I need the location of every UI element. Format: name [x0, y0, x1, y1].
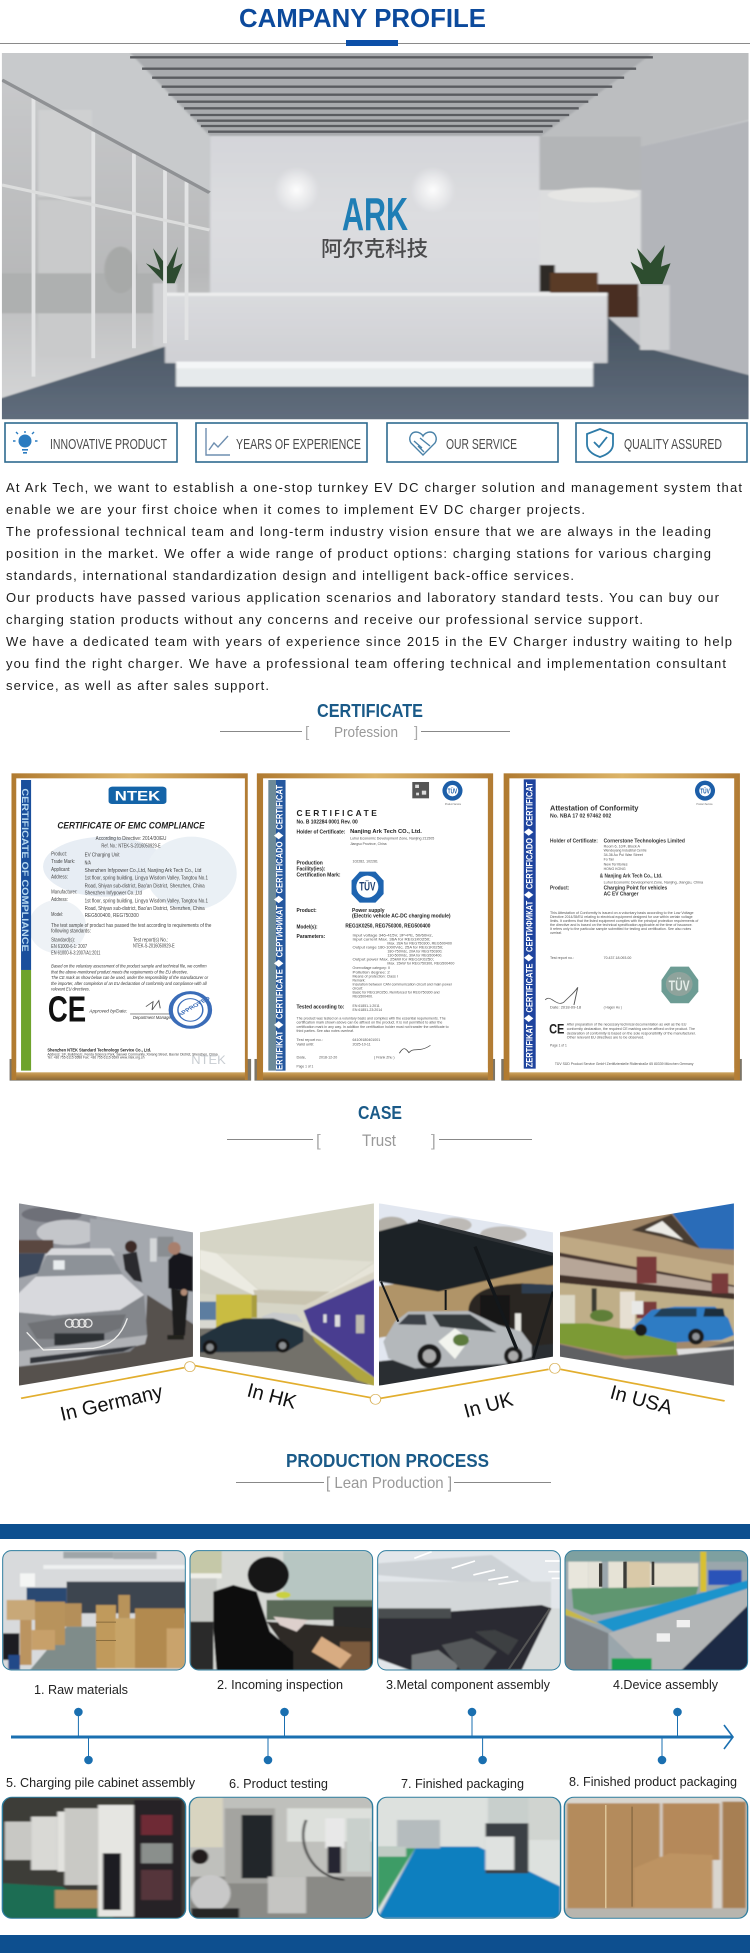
certificate: NTEK EMC compliance: NTEK-S-2016050929-E: [133, 943, 175, 949]
certificate: Attestation of Conformity: ( Hagen Hu ): [604, 1005, 622, 1009]
label: In HK: In HK: [245, 1380, 299, 1414]
badge: our service: OUR SERVICE: [446, 436, 517, 453]
certificate: Attestation of Conformity: HONG KONG: [604, 867, 626, 871]
certificate: TUV certificate Nanjing Ark Tech: Facility(ies):: [297, 866, 325, 872]
certificate: TUV certificate Nanjing Ark Tech: Max. 28A for REG750300, REG500400: [387, 941, 452, 945]
text block: company introduction: service, as well as after sales support.: [6, 678, 269, 693]
certificate: TUV certificate Nanjing Ark Tech: Overvoltage category: II: [353, 966, 390, 970]
certificate: TUV certificate Nanjing Ark Tech: third parties. See also notes overleaf.: [297, 1029, 354, 1033]
certificate: NTEK EMC compliance: Shenzhen Infypower Co.,Ltd, Nanjing Ark Tech Co., Ltd: [85, 868, 202, 874]
bottom blue band: [0, 1935, 750, 1953]
certificate: TUV certificate Nanjing Ark Tech: certification mark in any way. In addition the certification holder must not transfer the certificate to: [297, 1025, 449, 1029]
certificate: TUV certificate Nanjing Ark Tech: Certification Mark:: [297, 872, 341, 878]
photo: finished packaging: [378, 1798, 560, 1918]
certificate: TUV certificate Nanjing Ark Tech: Input voltage 346-415V, 3P+PE, 50/60Hz,: [353, 933, 433, 937]
certificate: TUV certificate Nanjing Ark Tech: Pollution degree: 2: [353, 970, 390, 974]
certificate: TUV certificate Nanjing Ark Tech: (Electric vehicle AC-DC charging module): [352, 914, 451, 919]
photo: raw materials: [3, 1551, 185, 1670]
certificate: Attestation of Conformity: No. NBA 17 02 97462 002: [550, 813, 612, 819]
certificate: NTEK EMC compliance: Standard(s):: [51, 937, 75, 943]
certificate: TUV certificate Nanjing Ark Tech: Model(s):: [297, 924, 318, 930]
photo: product testing: [190, 1798, 372, 1918]
certificate: NTEK EMC compliance: CERTIFICATE OF EMC COMPLIANCE: [57, 821, 205, 831]
certificate: Attestation of Conformity: Test report no.:: [550, 956, 574, 960]
title: Campany Profile: [0, 3, 750, 46]
text block: company introduction: charging station products without any concerns and receive our professional service support.: [6, 612, 643, 627]
certificate: TUV certificate Nanjing Ark Tech: CERTIFICATE: [297, 808, 377, 818]
certificate: NTEK EMC compliance: Based on the voluntary assessment of the product sample and technical file, we confirm: [51, 964, 207, 969]
certificate: TUV certificate Nanjing Ark Tech: Product Service: [445, 803, 461, 806]
certificate: NTEK EMC compliance: CERTIFICATE OF COMPLIANCE: [20, 788, 30, 952]
step captions: 3.Metal component assembly: [386, 1677, 550, 1692]
certificate: NTEK EMC compliance: that the above-mentioned product meets the requirements of the EU directive.: [51, 970, 188, 975]
timeline: gold zigzag line: [21, 1362, 725, 1404]
heading: certificate: [220, 701, 510, 741]
certificate: TUV certificate Nanjing Ark Tech: Means of protection: Class I: [353, 974, 398, 978]
certificate: TUV certificate Nanjing Ark Tech: Page 1 of 1: [297, 1064, 314, 1068]
photo: device assembly: [566, 1551, 748, 1670]
certificate: TUV certificate Nanjing Ark Tech: Valid until:: [297, 1042, 314, 1046]
text block: company introduction: [6, 480, 742, 693]
certificate: Attestation of Conformity: ZERTIFIKAT ◆ CERTIFICATE ◆ СЕРТИФИКАТ ◆ CERTIFICADO ◆ CERTIFICAT: [523, 782, 535, 1067]
label: In UK: In UK: [462, 1388, 516, 1423]
process photos row two: [0, 1793, 750, 1922]
case photos right pair: [379, 1204, 734, 1386]
certificate: TUV certificate Nanjing Ark Tech: Insulation between CAN communication circuit and main power: [353, 982, 452, 986]
certificate: NTEK EMC compliance: N/A: [85, 860, 91, 866]
production process panel: [0, 1545, 750, 1922]
certificate: Attestation of Conformity: Wendeyang Industrial Centre: [604, 848, 647, 852]
certificate: Attestation of Conformity: Luhui Economic Development Zone, Nanjing, Jiangsu, China: [604, 880, 704, 884]
certificate: NTEK EMC compliance: NTEK: [191, 1054, 226, 1067]
certificate: NTEK EMC compliance: Product:: [51, 852, 67, 857]
certificate: Attestation of Conformity: & Nanjing Ark Tech Co., Ltd.: [600, 873, 663, 879]
certificate: NTEK EMC compliance: Shenzhen Infypower Co.,Ltd: [85, 891, 142, 896]
certificate: Attestation of Conformity: AC EV Charger: [604, 891, 639, 897]
TUV certification mark: TÜV: [359, 880, 376, 894]
heading: certificate: [: [305, 724, 310, 741]
certificate: Attestation of Conformity: Attestation of Conformity: [550, 804, 639, 813]
certificate: TUV certificate Nanjing Ark Tech: Input current Max. 36A for REG1K0250;: [353, 937, 430, 941]
certificate: Attestation of Conformity: It refers only to the particular sample submitted for testing and certification. See also notes: [550, 927, 691, 931]
certificate: NTEK EMC compliance: Test report(s) No.:: [133, 937, 169, 943]
certificate: TUV certificate Nanjing Ark Tech: REG500400.: [353, 994, 373, 998]
plant left: [146, 247, 183, 283]
certificate: Attestation of Conformity: TÜV SÜD Product Service GmbH Zertifizierstelle Ridlerstraße 65 80339 München Germany: [555, 1062, 694, 1066]
certificate: NTEK EMC compliance: [10, 773, 251, 1081]
photo: metal component assembly: [378, 1551, 560, 1670]
photo: finished product packaging: [565, 1798, 747, 1918]
TUV hologram seal: [661, 967, 698, 1003]
certificate: Attestation of Conformity: CE: [549, 1020, 564, 1037]
heading: case: CASE: [358, 1103, 402, 1123]
certificate: Attestation of Conformity: Other relevant EU directives are to be observed.: [567, 1035, 644, 1039]
certificate: NTEK EMC compliance: Model:: [51, 912, 63, 918]
heading: production process: [236, 1451, 551, 1492]
heading: case: ]: [431, 1131, 436, 1150]
certificate: Attestation of Conformity: overleaf.: [550, 931, 562, 935]
text block: company introduction: We have a dedicated team with years of experience since 2015 in the EV Charger industry waiting to help: [6, 634, 732, 649]
photo: Germany, Audi charging: [19, 1204, 193, 1386]
certificate: NTEK EMC compliance: the importer, after completion of an EU declaration of conformity and compliance with all: [51, 982, 207, 987]
icon: light bulb: [13, 431, 38, 454]
text block: company introduction: Our products have passed various application scenarios and laboratory standard tests. You can buy our: [6, 590, 720, 605]
title: Campany Profile: CAMPANY PROFILE: [239, 3, 486, 33]
certificate: TUV certificate Nanjing Ark Tech: circuit:: [353, 986, 363, 990]
certificate: TUV certificate Nanjing Ark Tech: Max. 15kW for REG750300, REG500400: [387, 961, 455, 965]
photo: office reception with ARK logo: [0, 43, 750, 427]
photo: USA, motel charger: [560, 1204, 734, 1386]
certificate: NTEK EMC compliance: Shenzhen NTEK Standard Technology Service Co., Ltd.: [47, 1048, 151, 1053]
certificate: NTEK EMC compliance: Address: 1/F, Building E, Fenda Science Park, Sanwei Community, Xixiang Street, Bao'an District, Shenzhen, China: [47, 1052, 218, 1056]
feature badges row: [5, 423, 747, 462]
certificate: NTEK EMC compliance: Trade Mark:: [51, 859, 75, 865]
badge: quality assured: [576, 423, 747, 462]
certificate: NTEK EMC compliance: Address:: [51, 874, 68, 880]
badge: our service: [387, 423, 558, 462]
certificate: Attestation of Conformity: [501, 773, 742, 1081]
certificate: Attestation of Conformity: Date: 2018-09-18: [550, 1005, 582, 1009]
heading: case: [: [316, 1131, 321, 1150]
certificate: Attestation of Conformity: This Attestation of Conformity is issued on a voluntary basis according to the Low Voltage: [550, 911, 694, 915]
icon: shield check: [587, 429, 613, 457]
certificate: NTEK EMC compliance: relevant EU directives.: [51, 987, 90, 992]
certificate: TUV certificate Nanjing Ark Tech: ERTIFIKAT ◆ CERTIFICATE ◆ СЕРТИФИКАТ ◆ CERTIFICADO ◆ CERTIFICAT: [273, 785, 285, 1070]
certificate: NTEK EMC compliance: APPROVED: [176, 995, 213, 1018]
certificate: NTEK EMC compliance: Road, Shiyan sub-district, Bao'an District, Shenzhen, China: [85, 883, 205, 889]
certificate: NTEK EMC compliance: Ref. No.: NTEK-S-2016050929-E: [101, 843, 161, 849]
certificate: NTEK EMC compliance: Road, Shiyan sub-district, Bao'an District, Shenzhen, China: [85, 906, 205, 912]
certificate: Attestation of Conformity: 34-36 Au Pui Wan Street: [604, 853, 644, 857]
photo: UK, solar canopy charger: [379, 1204, 553, 1386]
certificate: TUV certificate Nanjing Ark Tech: 2025-10-11: [353, 1042, 371, 1046]
certificate: Attestation of Conformity: limits. It confirms that the listed equipment complies with the principal protection requirements of: [550, 919, 699, 923]
text block: company introduction: standards, international standardization design and intelligent back-office services.: [6, 568, 574, 583]
certificate: TUV certificate Nanjing Ark Tech: The product was tested on a voluntary basis and complies with the essential requirements. The: [297, 1016, 446, 1020]
step captions: 6. Product testing: [229, 1776, 328, 1791]
label: In Germany: In Germany: [58, 1381, 165, 1426]
certificate: TUV certificate Nanjing Ark Tech: 102282, 102281: [353, 859, 378, 863]
certificate: TUV certificate Nanjing Ark Tech: Luhui Economic Development Zone, Nanjing 211505: [350, 836, 435, 840]
plant right: [630, 245, 671, 284]
certificate: TUV certificate Nanjing Ark Tech: 2018-12-20: [319, 1055, 338, 1059]
certificate: TUV certificate Nanjing Ark Tech: [254, 773, 495, 1081]
certificate: TUV certificate Nanjing Ark Tech: certification mark shown above can be affixed on the product. It is not permitted to alter the: [297, 1020, 443, 1024]
TUV certification mark: [352, 872, 384, 903]
badge: years of experience: YEARS OF EXPERIENCE: [236, 436, 361, 453]
icon: line chart: [206, 428, 230, 455]
step captions: 7. Finished packaging: [401, 1776, 524, 1791]
certificate: Attestation of Conformity: TÜV: [700, 787, 710, 795]
certificate: NTEK EMC compliance: According to Directive: 2014/30/EU: [96, 836, 166, 842]
heading: case: [227, 1103, 532, 1150]
certificate: NTEK EMC compliance: 1st floor, spring building, Lingya Wisdom Valley, Tangtou No.1: [85, 876, 208, 881]
text block: company introduction: At Ark Tech, we want to establish a one-stop turnkey EV DC charger solution and management system that: [6, 480, 742, 495]
certificate: NTEK EMC compliance: Manufacturer:: [51, 889, 78, 895]
certificate: NTEK EMC compliance: Tel: +86 755 6115 6588 Fax: +86 755 6115 6599 www.ntek.org.cn: [47, 1055, 145, 1059]
certificate: TUV certificate Nanjing Ark Tech: TÜV: [448, 787, 457, 795]
certificate: TUV certificate Nanjing Ark Tech: Test report no.:: [297, 1038, 323, 1042]
icon: heart handshake: [410, 432, 436, 455]
process photos row one right: [375, 1545, 750, 1675]
certificate: Attestation of Conformity: Room 6, 10/F, Block A: [604, 844, 640, 848]
step captions: 8. Finished product packaging: [569, 1774, 737, 1789]
certificate: Attestation of Conformity: New Territories: [604, 862, 628, 866]
certificate: NTEK EMC compliance: Applicant:: [51, 867, 71, 873]
certificate: NTEK EMC compliance: Address:: [51, 897, 68, 903]
certificate: NTEK EMC compliance: The CE mark as show below can be used, under the responsibility of the manufacturer or: [51, 976, 209, 981]
certificate: TUV certificate Nanjing Ark Tech: Basic for REG1K0250, Reinforced for REG750300 and: [353, 990, 440, 994]
certificate: NTEK EMC compliance: NTEK: [115, 788, 161, 804]
certificate: NTEK EMC compliance: Approved by/Date:: [89, 1009, 128, 1014]
certificate: TUV certificate Nanjing Ark Tech: Nanjing Ark Tech CO., Ltd.: [350, 829, 422, 835]
certificate: Attestation of Conformity: Page 1 of 1: [550, 1043, 567, 1047]
badge: innovative product: INNOVATIVE PRODUCT: [50, 436, 167, 453]
badge: innovative product: [5, 423, 177, 462]
heading: certificate: CERTIFICATE: [317, 701, 423, 721]
heading: production process: PRODUCTION PROCESS: [286, 1451, 489, 1471]
certificate: TUV certificate Nanjing Ark Tech: Holder of Certificate:: [297, 829, 345, 835]
certificate: TUV certificate Nanjing Ark Tech: Output power Max. 25kW for REG1K0250;: [353, 957, 434, 961]
heading: certificate: ]: [414, 724, 418, 741]
certificate: TUV certificate Nanjing Ark Tech: Production: [297, 860, 323, 866]
step captions: [6, 1677, 737, 1791]
certificate: TUV certificate Nanjing Ark Tech: 64109180401001: [353, 1038, 381, 1042]
certificate: TUV certificate Nanjing Ark Tech: EN 61851-1:2011: [353, 1004, 380, 1008]
certificate: TUV certificate Nanjing Ark Tech: EN 61851-23:2014: [353, 1008, 383, 1012]
certificate: TUV certificate Nanjing Ark Tech: Jiangsu Province, China: [350, 842, 387, 846]
TUV hologram seal: TÜV: [669, 978, 690, 994]
certificate: TUV certificate Nanjing Ark Tech: 180-750Vdc, 20A for REG750300;: [387, 949, 442, 953]
heading: certificate: Profession: [334, 724, 398, 741]
certificate: NTEK EMC compliance: following standards:: [51, 929, 91, 934]
top blue band: [0, 1524, 750, 1539]
certificate: TUV certificate Nanjing Ark Tech: REG1K0250, REG750300, REG500400: [345, 924, 431, 929]
certificate: Attestation of Conformity: declaration of conformity is based on the sole responsibility of the manufacturer.: [567, 1031, 696, 1035]
certificate: TUV certificate Nanjing Ark Tech: No. B 102284 0001 Rev. 00: [297, 819, 358, 825]
label: In USA: In USA: [608, 1382, 675, 1419]
heading: case: Trust: [362, 1131, 396, 1150]
logo: ARK: ARK: [342, 188, 408, 240]
certificate: TUV certificate Nanjing Ark Tech: Date,: [297, 1055, 306, 1059]
certificate: TUV certificate Nanjing Ark Tech: Output range 180-1000Vdc, 25A for REG1K0250;: [353, 945, 443, 949]
certificate: Attestation of Conformity: Charging Point for vehicles: [604, 886, 668, 891]
certificate: NTEK EMC compliance: REG500400, REG750300: [85, 913, 139, 919]
certificate: TUV certificate Nanjing Ark Tech: Remark:: [353, 978, 365, 982]
text block: company introduction: The professional technical team and long-term industry vision ensure that we are always in the leading: [6, 524, 711, 539]
certificate: Attestation of Conformity: Product Service: [696, 803, 713, 806]
certificate: Attestation of Conformity: Fo Tan: [604, 857, 615, 861]
certificate: Attestation of Conformity: the directive and is based on the technical specification applicable at the time of issuance.: [550, 923, 693, 927]
certificate: Attestation of Conformity: Holder of Certificate:: [550, 838, 598, 844]
certificate: NTEK EMC compliance: CE: [48, 990, 86, 1030]
process timeline arrow: [11, 1708, 733, 1764]
text block: company introduction: position in the market. We offer a wide range of product options: charging stations for various charging: [6, 546, 711, 561]
step captions: 2. Incoming inspection: [217, 1677, 343, 1692]
certificate: NTEK EMC compliance: Department Manager: [133, 1016, 173, 1021]
step captions: 4.Device assembly: [613, 1677, 718, 1692]
certificate: NTEK EMC compliance: EN 61000-6-3:2007/A1:2011: [51, 951, 101, 956]
process photos row one left: [0, 1545, 377, 1675]
photo: incoming inspection: [190, 1551, 372, 1670]
case photos left pair: [19, 1204, 374, 1386]
certificate: NTEK EMC compliance: The test sample of product has passed the test according to requirements of the: [51, 923, 212, 929]
certificate: TUV certificate Nanjing Ark Tech: Parameters:: [297, 934, 325, 940]
logo: Chinese company name: 阿尔克科技: [321, 238, 428, 261]
step captions: 1. Raw materials: [34, 1682, 128, 1697]
certificate: TUV certificate Nanjing Ark Tech: 130-500Vdc, 30A for REG500400.: [387, 953, 442, 957]
photo: charging pile cabinet assembly: [3, 1798, 185, 1918]
badge: years of experience: [196, 423, 367, 462]
text block: company introduction: enable we are your first choice when it comes to implement EV DC charger projects.: [6, 502, 585, 517]
certificate: TUV certificate Nanjing Ark Tech: Tested according to:: [297, 1004, 344, 1010]
certificate: Attestation of Conformity: Product:: [550, 886, 569, 891]
certificate: NTEK EMC compliance: 1st floor, spring building, Lingya Wisdom Valley, Tangtou No.1: [85, 899, 208, 904]
certificate: Attestation of Conformity: Directive 2014/35/EU relating to electrical equipment designed for use within certain voltage: [550, 915, 693, 919]
step captions: 5. Charging pile cabinet assembly: [6, 1775, 195, 1790]
certificate: NTEK EMC compliance: EV Charging Unit: [85, 853, 120, 858]
heading: production process: [ Lean Production ]: [326, 1475, 452, 1492]
certificate: Attestation of Conformity: Cornerstone Technologies Limited: [604, 838, 685, 844]
certificate: TUV certificate Nanjing Ark Tech: ( Frank Zhu ): [374, 1055, 395, 1059]
certificate: NTEK EMC compliance: EN 61000-6-1: 2007: [51, 944, 87, 950]
certificate: Attestation of Conformity: conformity declaration, the required CE marking can be affixed on the product. The: [567, 1027, 696, 1031]
certificate: Attestation of Conformity: After preparation of the necessary technical documentation as well as the EU: [567, 1022, 686, 1026]
case photos and timeline: [10, 1195, 742, 1426]
certificates row: [10, 773, 742, 1081]
photo: Hong Kong, underground parking: [200, 1204, 374, 1386]
certificate: TUV certificate Nanjing Ark Tech: Product:: [297, 908, 317, 914]
certificate: TUV certificate Nanjing Ark Tech: Power supply: [352, 908, 385, 914]
text block: company introduction: you find the right charger. We have a professional team offering technical and implementation consultant: [6, 656, 726, 671]
certificate: Attestation of Conformity: 70.437.18.093.00: [604, 956, 632, 960]
